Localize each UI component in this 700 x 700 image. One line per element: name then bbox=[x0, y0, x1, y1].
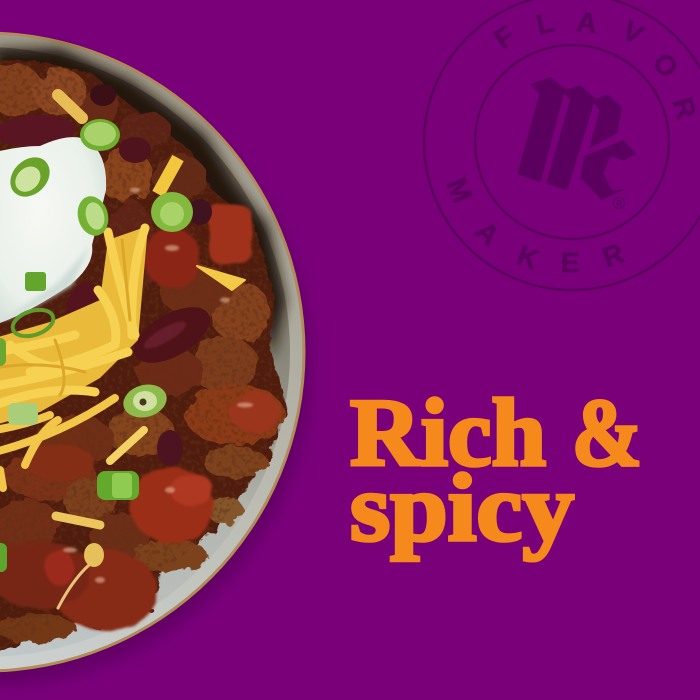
bowl rim bbox=[0, 32, 306, 672]
onion slice top bbox=[10, 157, 50, 197]
registered mark: R bbox=[616, 199, 622, 208]
kidney beans bbox=[0, 84, 219, 466]
sour cream bbox=[0, 137, 106, 323]
emblem text: FLAVOR MAKER: O bbox=[647, 47, 685, 84]
emblem text: FLAVOR MAKER bbox=[441, 6, 700, 278]
emblem text: FLAVOR MAKER: A bbox=[470, 215, 506, 252]
onion ring bbox=[10, 308, 56, 338]
McCormick Mc logo bbox=[517, 77, 637, 200]
headline bbox=[350, 379, 642, 561]
headline: Rich bbox=[350, 379, 546, 486]
Flavor Maker emblem bbox=[424, 0, 700, 290]
emblem rings bbox=[424, 0, 700, 290]
emblem text: FLAVOR MAKER: M bbox=[441, 173, 478, 207]
headline: spicy bbox=[350, 454, 574, 561]
emblem text: FLAVOR MAKER: K bbox=[513, 239, 543, 276]
bowl of chili bbox=[0, 32, 306, 672]
emblem text: FLAVOR MAKER: L bbox=[533, 6, 557, 40]
emblem text: FLAVOR MAKER: F bbox=[489, 20, 520, 55]
chili food bbox=[0, 50, 300, 660]
green onions bbox=[0, 119, 193, 572]
emblem text: FLAVOR MAKER: A bbox=[575, 6, 599, 39]
chili base bbox=[0, 60, 288, 652]
sauce highlights bbox=[63, 188, 253, 583]
ground meat bbox=[0, 64, 285, 642]
meat grain bbox=[0, 50, 300, 660]
registered mark bbox=[614, 198, 624, 208]
headline: & bbox=[572, 379, 642, 486]
emblem text: FLAVOR MAKER: V bbox=[617, 14, 649, 51]
shredded cheese bbox=[0, 95, 245, 608]
emblem text: FLAVOR MAKER: R bbox=[598, 237, 628, 273]
tomato chunks bbox=[0, 205, 280, 630]
emblem text: FLAVOR MAKER: E bbox=[560, 247, 580, 278]
bowl shadow bbox=[0, 45, 310, 685]
